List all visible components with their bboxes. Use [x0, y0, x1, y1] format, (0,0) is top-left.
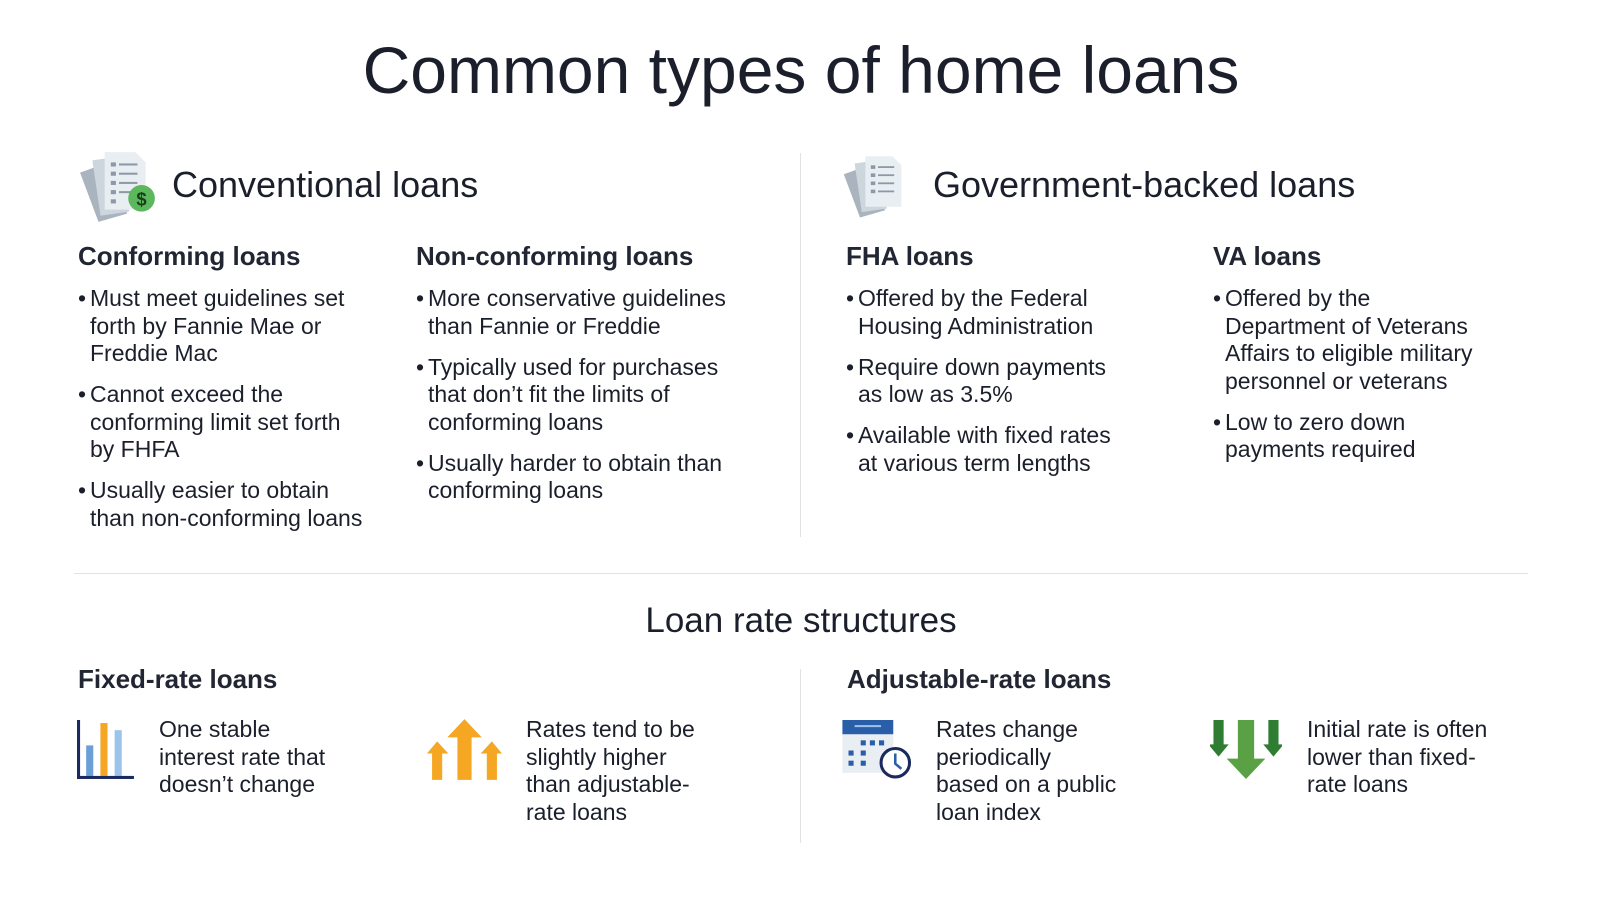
- text: rates change: based on a public: [936, 771, 1116, 797]
- column: conforming loans: by FHFA: [90, 436, 179, 462]
- subheading: adjustable-rate loans: Adjustable-rate loans: [847, 664, 1111, 694]
- column: conforming loans: Freddie Mac: [90, 340, 218, 366]
- heading: loan rate structures: Loan rate structures: [645, 601, 957, 640]
- icon: calendar clock: [842, 720, 912, 778]
- text: rates higher: than adjustable-: [526, 771, 690, 797]
- column: non-conforming loans: that don’t fit the limits of: [428, 381, 670, 407]
- text: rates higher: rate loans: [526, 799, 627, 825]
- text: fixed stable: [159, 716, 325, 797]
- column: FHA loans: [846, 241, 1111, 476]
- column: VA loans: [1213, 241, 1473, 462]
- text: rates change: periodically: [936, 744, 1051, 770]
- icon: up arrows: [427, 719, 502, 780]
- column: VA loans: Affairs to eligible military: [1225, 340, 1473, 366]
- column: FHA loans: as low as 3.5%: [858, 381, 1013, 407]
- text: rates change: Rates change: [936, 716, 1078, 742]
- column: conforming loans: forth by Fannie Mae or: [90, 313, 321, 339]
- column: VA loans: Department of Veterans: [1225, 313, 1468, 339]
- icon: documents: [844, 156, 902, 218]
- column: VA loans: Low to zero down: [1225, 409, 1405, 435]
- column: non-conforming loans: Usually harder to obtain than: [428, 450, 722, 476]
- text: rates change: loan index: [936, 799, 1041, 825]
- column: non-conforming loans: than Fannie or Freddie: [428, 313, 661, 339]
- column: non-conforming loans: [416, 241, 726, 503]
- subheading: fixed-rate loans: Fixed-rate loans: [78, 664, 277, 694]
- text: fixed stable: doesn’t change: [159, 771, 315, 797]
- column: non-conforming loans: More conservative guidelines: [428, 285, 726, 311]
- text: fixed stable: interest rate that: [159, 744, 325, 770]
- column: non-conforming loans: conforming loans: [428, 477, 603, 503]
- heading: government-backed loans: Government-backed loans: [933, 164, 1355, 205]
- column: VA loans: personnel or veterans: [1225, 368, 1447, 394]
- icon: bar chart: [77, 720, 134, 779]
- column: conforming loans: Cannot exceed the: [90, 381, 283, 407]
- column: conforming loans: [78, 241, 362, 531]
- column: FHA loans: Offered by the Federal: [858, 285, 1088, 311]
- text: rates higher: slightly higher: [526, 744, 667, 770]
- column: FHA loans: Housing Administration: [858, 313, 1093, 339]
- icon: documents with dollar: [80, 152, 155, 222]
- column: FHA loans: FHA loans: [846, 241, 974, 271]
- text: rates higher: [526, 716, 695, 825]
- column: conforming loans: Usually easier to obtain: [90, 477, 329, 503]
- heading: conventional loans: Conventional loans: [172, 164, 478, 205]
- column: non-conforming loans: Typically used for purchases: [428, 354, 718, 380]
- column: non-conforming loans: conforming loans: [428, 409, 603, 435]
- column: VA loans: Offered by the: [1225, 285, 1370, 311]
- text: rates change: [936, 716, 1116, 825]
- icon: down arrows: [1210, 720, 1282, 779]
- text: initial rate: [1307, 716, 1487, 797]
- text: initial rate: Initial rate is often: [1307, 716, 1487, 742]
- column: VA loans: VA loans: [1213, 241, 1321, 271]
- column: FHA loans: Require down payments: [858, 354, 1106, 380]
- column: FHA loans: Available with fixed rates: [858, 422, 1111, 448]
- column: FHA loans: at various term lengths: [858, 450, 1091, 476]
- text: initial rate: lower than fixed-: [1307, 744, 1476, 770]
- text: fixed stable: One stable: [159, 716, 270, 742]
- text: rates higher: Rates tend to be: [526, 716, 695, 742]
- column: conforming loans: Must meet guidelines set: [90, 285, 344, 311]
- column: conforming loans: than non-conforming loans: [90, 505, 362, 531]
- text: initial rate: rate loans: [1307, 771, 1408, 797]
- icon: documents with dollar: $: [136, 188, 147, 209]
- column: conforming loans: Conforming loans: [78, 241, 300, 271]
- column: non-conforming loans: Non-conforming loans: [416, 241, 693, 271]
- column: VA loans: payments required: [1225, 436, 1416, 462]
- title: Common types of home loans: [363, 33, 1239, 107]
- column: conforming loans: conforming limit set forth: [90, 409, 341, 435]
